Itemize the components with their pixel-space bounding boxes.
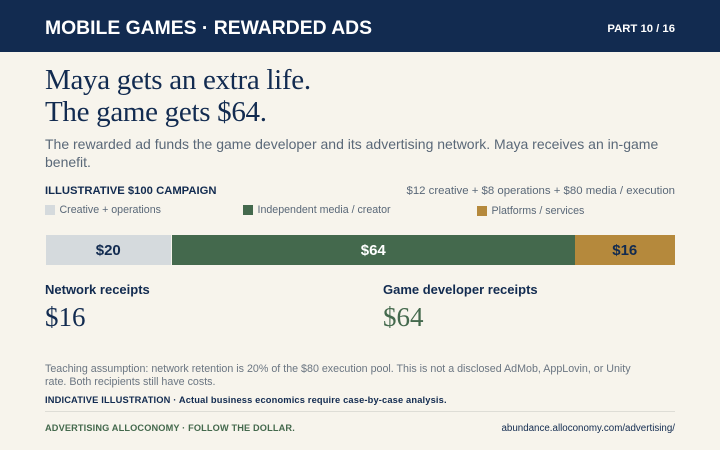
developer value: $64 — [383, 302, 424, 332]
segment: $64: $64 — [361, 242, 386, 259]
stat: network receipts — [45, 282, 150, 332]
subheading: The rewarded ad funds the game developer and its advertising network. Maya receives an in-game — [45, 136, 658, 152]
part indicator: PART 10 / 16 — [607, 23, 675, 35]
network label: Network receipts — [45, 282, 150, 297]
main headline: The game gets $64. — [45, 96, 267, 128]
header title: MOBILE GAMES · REWARDED ADS — [45, 17, 372, 39]
developer label: Game developer receipts — [383, 282, 538, 297]
subheading — [45, 136, 658, 170]
segment: $16: $16 — [612, 242, 637, 259]
teaching assumption note: Teaching assumption: network retention is 20% of the $80 execution pool. This is not a disclosed AdMob, AppLovin, or Unity — [45, 363, 631, 375]
campaign label: ILLUSTRATIVE $100 CAMPAIGN — [45, 185, 216, 197]
teaching assumption note: rate. Both recipients still have costs. — [45, 376, 215, 388]
segment: $16 — [575, 235, 674, 265]
network value: $16 — [45, 302, 86, 332]
disclaimer: INDICATIVE ILLUSTRATION · Actual business economics require case-by-case analysis. — [45, 395, 447, 405]
legend: independent media: Independent media / creator — [258, 204, 391, 216]
legend: creative + operations: Creative + operations — [60, 204, 161, 216]
campaign breakdown: $12 creative + $8 operations + $80 media / execution — [406, 185, 675, 197]
legend: platforms: Platforms / services — [492, 205, 584, 217]
header band — [0, 0, 720, 52]
legend — [45, 204, 584, 217]
segment: $64 — [172, 235, 574, 265]
segment: $20: $20 — [96, 242, 121, 259]
stacked bar — [46, 235, 675, 265]
subheading: benefit. — [45, 154, 91, 170]
footer url: abundance.alloconomy.com/advertising/ — [501, 423, 675, 434]
main headline — [45, 64, 311, 128]
teaching assumption note — [45, 363, 631, 388]
main headline: Maya gets an extra life. — [45, 64, 311, 96]
stat: game developer receipts — [383, 282, 538, 332]
segment: $20 — [46, 235, 170, 265]
footer tagline: ADVERTISING ALLOCONOMY · FOLLOW THE DOLLAR. — [45, 423, 295, 433]
